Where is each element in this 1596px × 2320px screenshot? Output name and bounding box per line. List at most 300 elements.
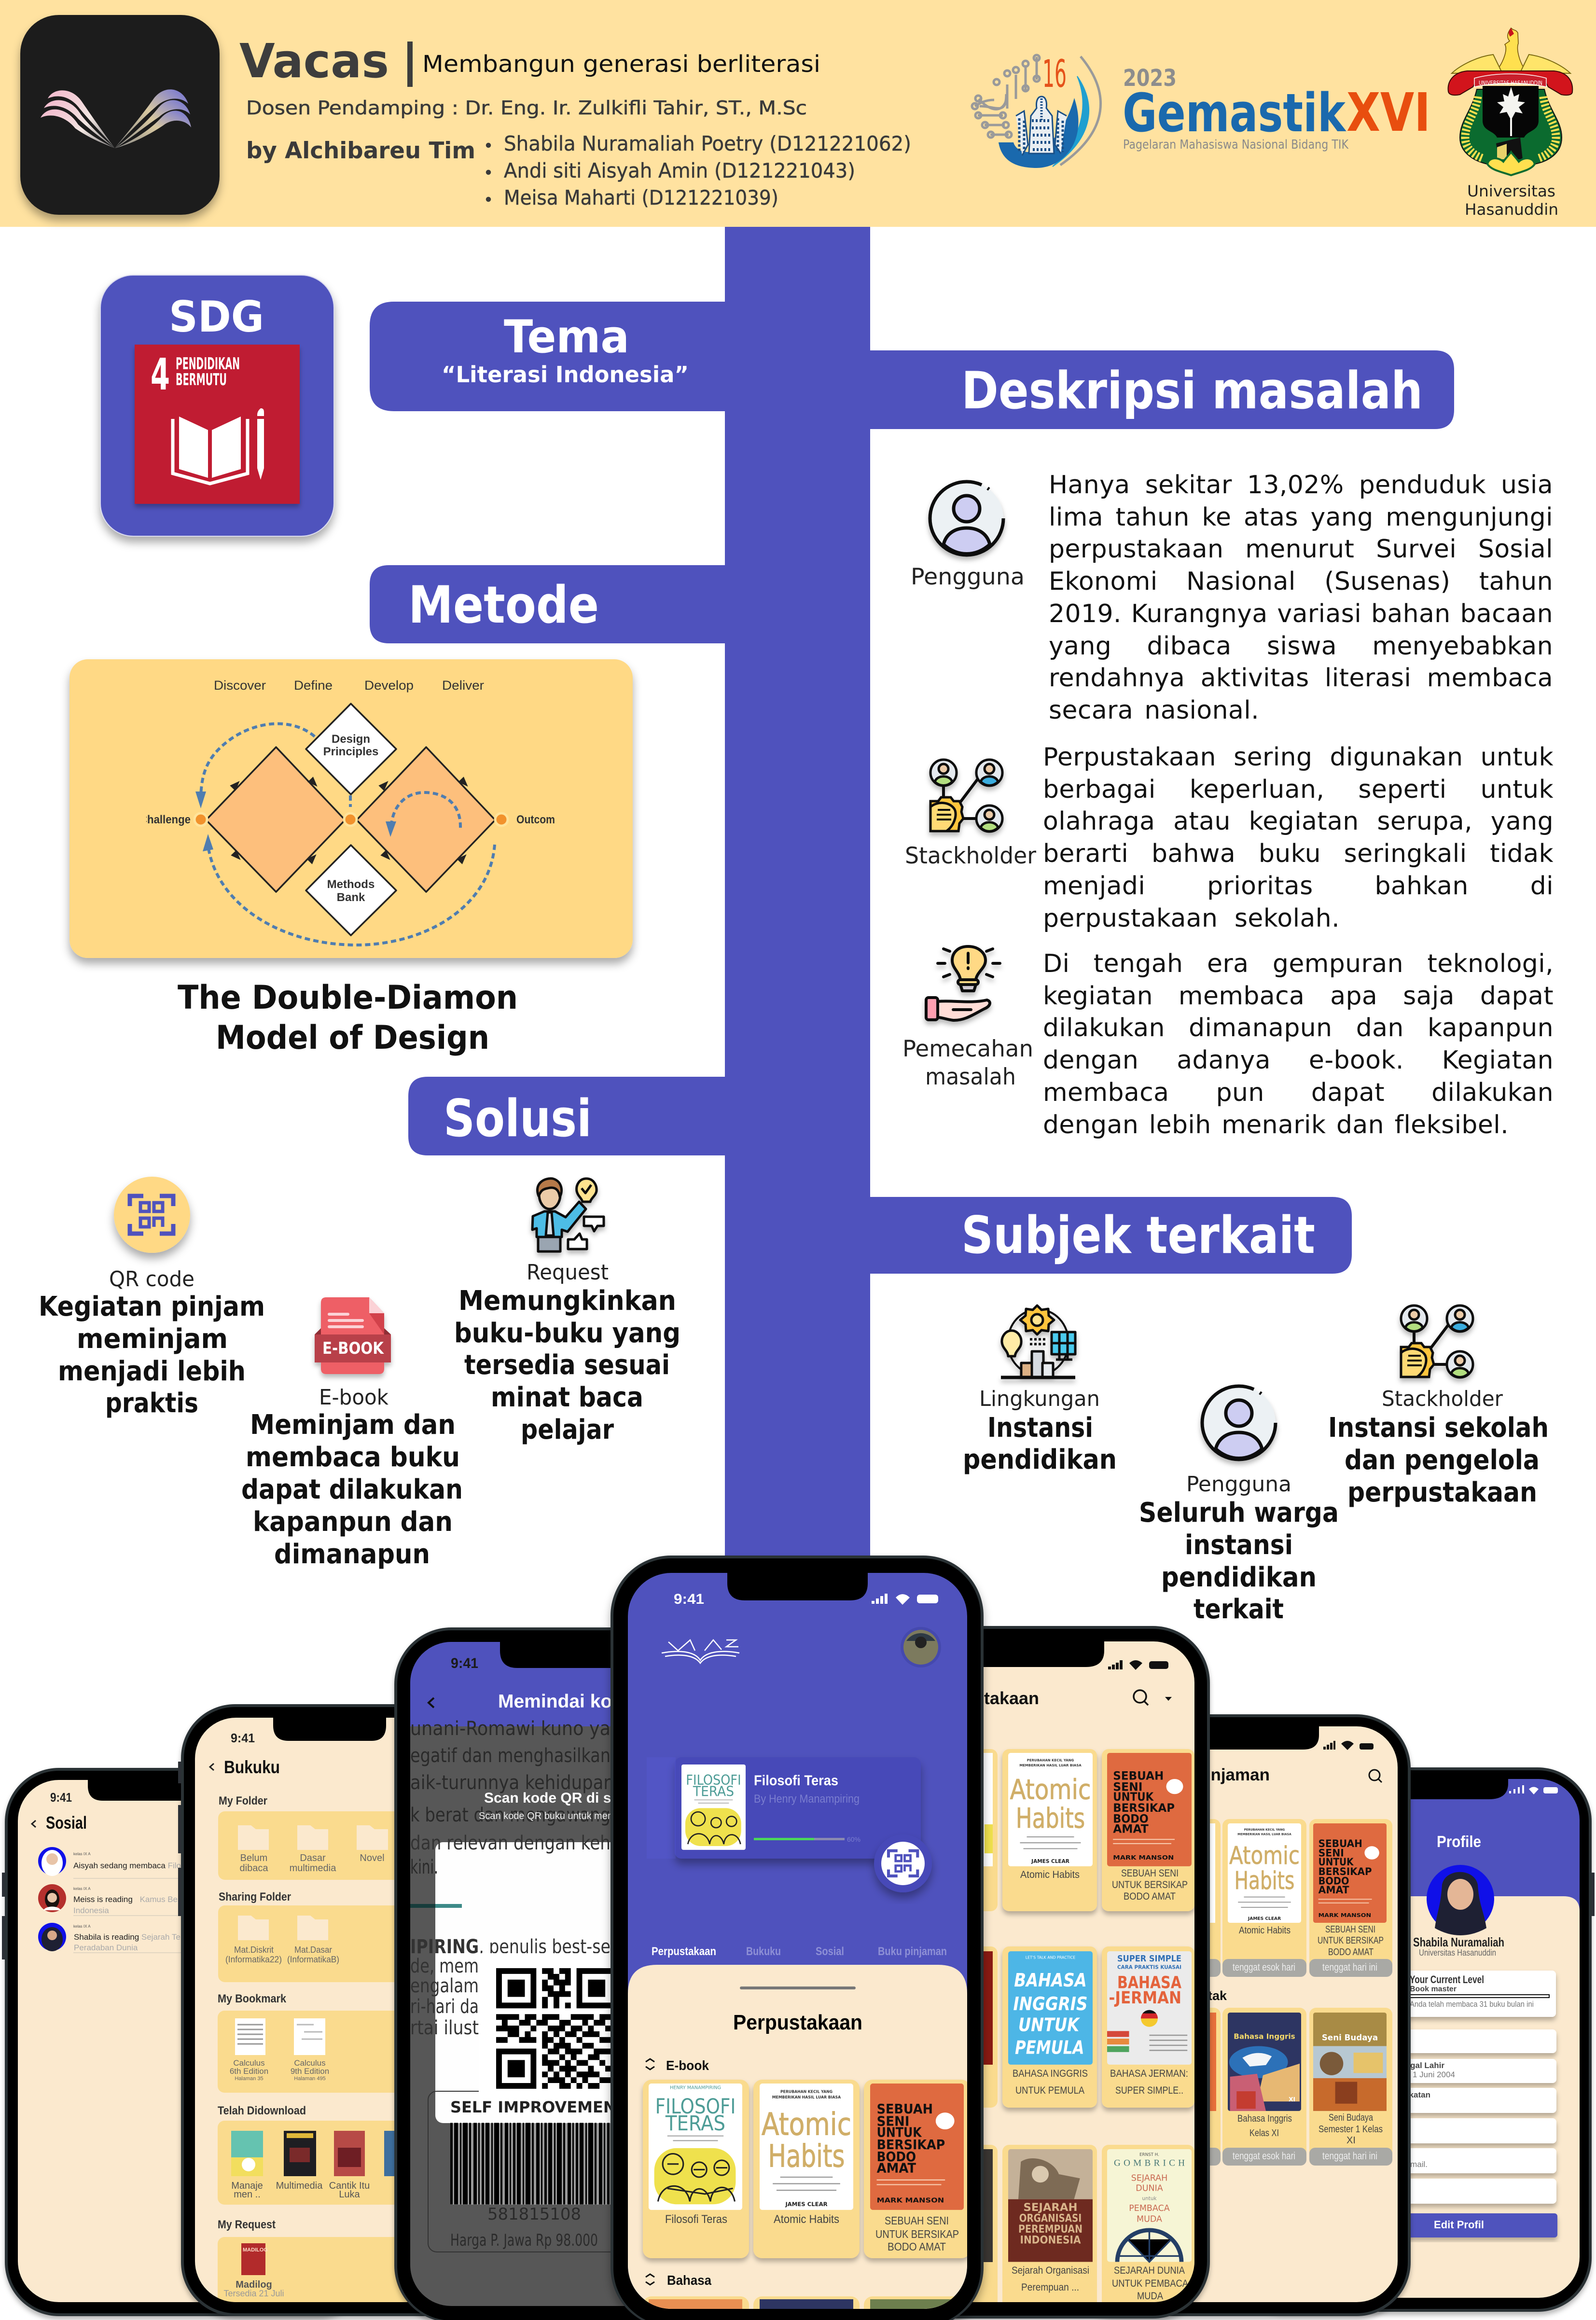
book card: Sebuah Seni: SEBUAH SENI <box>885 2214 949 2227</box>
paragraph: problem description for users: yang dibaca siswa menyebabkan <box>1049 632 1553 661</box>
book card: Sebuah Seni: SEBUAH <box>877 2102 933 2117</box>
edit profile button <box>1390 2213 1557 2237</box>
scanner window: engalam <box>410 1975 479 1997</box>
diagram text: Bank <box>337 891 365 904</box>
diagram caption: The Double-Diamon <box>178 979 518 1017</box>
section: My Folder: Belum <box>240 1853 267 1863</box>
diagram text: Principles <box>323 745 378 758</box>
loan cards row 1 <box>1178 1819 1392 1977</box>
icon: idea in hand <box>926 946 1000 1020</box>
paragraph: proposed solution: dengan lebih menarik dan fleksibel. <box>1043 1111 1509 1139</box>
current book card: Filosofi Teras <box>754 1773 838 1789</box>
paragraph: problem description for users: rendahnya aktivitas literasi membaca <box>1049 664 1553 693</box>
description: perpustakaan <box>1347 1477 1537 1508</box>
solution: E-book <box>241 1297 463 1570</box>
description: minat baca <box>491 1382 643 1413</box>
book grid row 3: Perempuan ... <box>1021 2282 1079 2293</box>
tabs: Perpustakaan <box>652 1945 716 1958</box>
cover: Bahasa Inggris untuk Pemula: UNTUK <box>1018 2014 1081 2036</box>
cover: Bahasa Inggris untuk Pemula: BAHASA <box>1014 1970 1087 1991</box>
cover: Bahasa Inggris untuk Pemula <box>1008 1951 1093 2065</box>
level card <box>1390 1971 1556 2017</box>
cover: Atomic Habits: MEMBERIKAN HASIL LUAR BIASA <box>1019 1764 1082 1767</box>
tabs: Sosial <box>816 1945 844 1958</box>
section: Sharing Folder <box>218 1890 459 1982</box>
central vertical column <box>725 227 870 1602</box>
cover: Sejarah Organisasi: PEREMPUAN <box>1018 2223 1083 2236</box>
section: Bahasa <box>646 2273 711 2288</box>
loan cards row 2: Seni Budaya <box>1329 2112 1374 2123</box>
book card: Filosofi Teras <box>643 2080 749 2258</box>
cover: Sejarah Dunia: GOMBRICH <box>1114 2158 1185 2168</box>
screen title: Sosial <box>46 1813 87 1833</box>
book card: Atomic Habits: Habits <box>768 2139 845 2175</box>
scanner header: 9:41 <box>451 1655 478 1671</box>
section: Telah Didownload: Telah Didownload <box>218 2104 306 2117</box>
Gemastik wordmark: 2023 <box>1123 65 1177 92</box>
panel: double diamond diagram <box>69 659 633 958</box>
description: kapanpun dan <box>253 1506 453 1538</box>
SDG 4 tile: 4 <box>151 349 170 400</box>
cover: Bahasa Inggris untuk Pemula: INGGRIS <box>1013 1993 1088 2015</box>
section: My Folder <box>218 1794 459 1880</box>
SDG 4 tile: BERMUTU <box>176 370 227 389</box>
description: dimanapun <box>274 1539 430 1570</box>
cover: Bahasa Jerman: BAHASA <box>1117 1973 1181 1993</box>
section: E-book <box>646 2058 709 2073</box>
paragraph: problem description for stakeholders: berbagai keperluan, seperti untuk <box>1043 775 1554 804</box>
cover: Sejarah Organisasi <box>1008 2149 1093 2262</box>
icon: QR code badge <box>114 1177 190 1253</box>
scanner window: IPIRING, penulis best-se <box>410 1936 611 1958</box>
phase labels: Develop <box>364 678 414 693</box>
QR code <box>479 1953 648 2101</box>
book grid row 2: SUPER SIMPLE.. <box>1115 2085 1183 2096</box>
section: Telah Didownload: Multimedia <box>276 2181 323 2191</box>
cover: Sejarah Dunia <box>1107 2149 1192 2262</box>
cover: Atomic Habits: PERUBAHAN KECIL YANG <box>1027 1758 1074 1762</box>
team members list: Andi siti Aisyah Amin (D121221043) <box>504 159 855 182</box>
diagram text: Challenge <box>139 813 191 826</box>
loan cards row 2 <box>1178 2008 1392 2166</box>
book card: Sebuah Seni <box>864 2080 970 2258</box>
icon: Vacas app logo <box>20 15 220 215</box>
status icons <box>1108 1660 1168 1670</box>
book grid row 1: SEBUAH SENI <box>1121 1868 1179 1879</box>
team members list <box>486 132 911 209</box>
cover: Sebuah Seni: AMAT <box>1318 1884 1349 1896</box>
subject: Stackholder <box>1328 1306 1549 1508</box>
phone: Peminjaman screen <box>1062 1714 1411 2316</box>
profile name: Universitas Hasanuddin <box>1419 1948 1496 1958</box>
section: Telah Didownload <box>218 2104 459 2205</box>
section: My Bookmark: Halaman 35 <box>235 2076 264 2082</box>
level card: Your Current Level <box>1410 1973 1484 1986</box>
title: Vacas: Vacas <box>239 34 389 88</box>
cover: Sejarah Dunia: ERNST H. <box>1139 2153 1159 2157</box>
cover: Sejarah Organisasi: ORGANISASI <box>1019 2212 1082 2224</box>
scanner window: kini. <box>410 1856 438 1878</box>
book grid row 2: BAHASA JERMAN: <box>1110 2068 1188 2079</box>
icon: user <box>1202 1386 1276 1459</box>
phase labels: Define <box>294 678 333 693</box>
subject: Pengguna <box>1139 1386 1339 1625</box>
next row book tops <box>643 2296 970 2320</box>
book grid row 3: UNTUK PEMBACA <box>1112 2278 1188 2289</box>
status time: 9:41 <box>50 1790 72 1805</box>
cover: Atomic Habits: JAMES CLEAR <box>1031 1859 1069 1864</box>
description: pendidikan <box>963 1444 1117 1475</box>
QR scan button <box>874 1834 932 1892</box>
profile header: Profile <box>1437 1833 1481 1850</box>
cover: Bahasa Inggris XI: Bahasa Inggris <box>1234 2032 1295 2041</box>
loan cards row 2: Kelas XI <box>1249 2128 1279 2139</box>
sheet title: Perpustakaan <box>733 2011 862 2034</box>
profile name: Shabila Nuramaliah <box>1413 1935 1504 1949</box>
paragraph: problem description for stakeholders: olahraga atau kegiatan serupa, yang <box>1043 807 1554 836</box>
paragraph: proposed solution: dilakukan dimanapun dan kapanpun <box>1043 1014 1554 1042</box>
avatar <box>901 1627 941 1667</box>
cover: Atomic Habits: Habits <box>1235 1866 1294 1895</box>
paragraph: problem description for users: perpustakaan menurut Survei Sosial <box>1049 535 1553 564</box>
label: Pemecahan masalah: masalah <box>925 1064 1016 1090</box>
scan instructions: Scan kode QR di sini <box>484 1790 628 1806</box>
social activity list: Aisyah sedang membaca Filosofi Teras <box>73 1861 216 1870</box>
description: membaca buku <box>246 1442 460 1473</box>
heading: Tema: “Literasi Indonesia” <box>442 361 689 388</box>
screen title <box>1170 1765 1382 1784</box>
label: Stackholder: Stackholder <box>905 843 1037 869</box>
section: My Folder: My Folder <box>219 1794 267 1807</box>
library sheet <box>628 1965 970 2320</box>
Gemastik wordmark <box>1123 65 1430 152</box>
profile fields <box>1390 2029 1556 2204</box>
book card: Sebuah Seni: UNTUK BERSIKAP <box>875 2228 959 2240</box>
SDG 4 tile: PENDIDIKAN <box>176 354 240 374</box>
team name: by Alchibareu Tim <box>246 138 475 164</box>
description: Memungkinkan <box>458 1285 676 1317</box>
status icons <box>1323 1741 1374 1750</box>
cover: Seni Budaya: Seni Budaya <box>1322 2033 1378 2042</box>
subject: Lingkungan <box>963 1306 1117 1475</box>
book grid row 3: SEJARAH DUNIA <box>1114 2265 1185 2276</box>
scanner header <box>410 1642 667 1726</box>
book grid row 1: BODO AMAT <box>1124 1891 1176 1902</box>
description: Instansi <box>987 1412 1093 1444</box>
edit profile button: Edit Profil <box>1434 2219 1484 2231</box>
heading: Subjek terkait: Subjek terkait <box>961 1206 1315 1265</box>
paragraph: problem description for stakeholders: menjadi prioritas bahkan di <box>1043 872 1554 901</box>
description <box>241 1409 463 1570</box>
description: menjadi lebih <box>58 1356 246 1387</box>
section: Sharing Folder: (Informatika22) <box>225 1955 282 1964</box>
section: Bahasa: Bahasa <box>667 2273 711 2288</box>
label: Pengguna <box>1186 1472 1291 1497</box>
description: terkait <box>1194 1594 1284 1625</box>
book card: Atomic Habits <box>753 2080 860 2258</box>
section: Telah Didownload: Luka <box>339 2189 361 2200</box>
description: meminjam <box>77 1323 228 1355</box>
section: My Request <box>218 2218 459 2314</box>
cover: Atomic Habits: Atomic <box>1010 1774 1091 1806</box>
heading: Tema: Tema <box>504 311 629 363</box>
book grid row 3: Sejarah Organisasi <box>1012 2265 1089 2276</box>
label: Stackholder <box>1382 1387 1503 1411</box>
description: Kegiatan pinjam <box>39 1291 265 1322</box>
cover: Sebuah Seni: AMAT <box>1113 1821 1149 1835</box>
cover: Atomic Habits: MEMBERIKAN HASIL LUAR BIASA <box>1237 1833 1291 1836</box>
book grid row 1: UNTUK BERSIKAP <box>1112 1879 1188 1890</box>
dashed arrow heads <box>195 792 396 851</box>
university name: Universitas <box>1467 182 1555 200</box>
description: praktis <box>105 1388 198 1419</box>
loan cards row 1: tenggat hari ini <box>1322 1962 1377 1973</box>
level card: Anda telah membaca 31 buku bulan ini <box>1410 2000 1534 2009</box>
section: My Bookmark: Calculus <box>294 2058 326 2068</box>
description: dapat dilakukan <box>241 1474 463 1505</box>
diagram text: Outcom <box>516 813 555 826</box>
social activity list: Indonesia <box>73 1906 109 1915</box>
field labels: Angkatan <box>1393 2090 1430 2099</box>
field labels <box>1391 2061 1455 2169</box>
description: pelajar <box>521 1414 614 1445</box>
heading: Metode: Metode <box>408 575 599 635</box>
heading: Subjek terkait <box>870 1197 1352 1274</box>
cover: Sebuah Seni: UNTUK <box>1318 1856 1354 1868</box>
social activity list: Peradaban Dunia <box>74 1943 138 1952</box>
paragraph: proposed solution: Di tengah era gempuran teknologi, <box>1043 949 1554 978</box>
Gemastik wordmark: Gemastik <box>1123 82 1346 144</box>
cover: Sebuah Seni: BODO <box>1318 1875 1349 1888</box>
scanner window: de, mem <box>410 1955 479 1977</box>
phone: Sosial screen <box>2 1768 372 2316</box>
book grid row 3: MUDA <box>1137 2291 1163 2302</box>
paragraph: problem description for users <box>1049 471 1553 725</box>
icon: Gemastik emblem: 16 <box>1042 53 1067 96</box>
loan cards row 1: tenggat esok hari <box>1233 1962 1295 1973</box>
book card: Filosofi Teras: TERAS <box>665 2112 725 2136</box>
cover: Bahasa Jerman: SUPER SIMPLE <box>1117 1954 1181 1964</box>
book page behind the overlay: aik-turunnya kehidupar <box>410 1772 611 1794</box>
section: Telah Didownload: men .. <box>234 2189 261 2200</box>
book card: Filosofi Teras: FILOSOFI <box>655 2095 736 2119</box>
paragraph: problem description for users: Ekonomi Nasional (Susenas) tahun <box>1049 567 1553 596</box>
icon: Stackholder network <box>930 760 1002 832</box>
profile header <box>1255 1779 1580 1924</box>
label: Pengguna: Pengguna <box>911 564 1025 590</box>
cover: Seni Budaya <box>1313 2013 1387 2111</box>
description <box>39 1291 265 1419</box>
paragraph: problem description for stakeholders: berarti bahwa buku seringkali tidak <box>1043 839 1554 868</box>
profile avatar <box>1427 1865 1494 1935</box>
book page behind the overlay: unani-Romawi kuno ya <box>410 1718 611 1740</box>
solution: QR code <box>39 1177 265 1419</box>
cover: Sebuah Seni: BERSIKAP <box>1113 1801 1175 1815</box>
description: tersedia sesuai <box>464 1349 670 1381</box>
level card: Book master <box>1410 1985 1457 1993</box>
description: Instansi sekolah <box>1328 1412 1549 1444</box>
cover: Sejarah Dunia: MUDA <box>1137 2215 1162 2224</box>
label: E-book <box>319 1385 389 1410</box>
icon: e-book <box>315 1297 391 1374</box>
profile name <box>1413 1935 1504 1958</box>
book card: Filosofi Teras: Filosofi Teras <box>665 2213 727 2226</box>
cover: Sejarah Dunia: PEMBACA <box>1129 2204 1170 2213</box>
cover: Atomic Habits <box>1008 1753 1093 1866</box>
label: Pemecahan masalah: Pemecahan <box>902 1036 1033 1062</box>
barcode sticker: Harga P. Jawa Rp 98.000 <box>450 2231 598 2250</box>
cover: Bahasa Jerman <box>1107 1951 1192 2065</box>
loan cards row 2: tenggat hari ini <box>1322 2151 1377 2162</box>
loan cards row 2: Bahasa Inggris <box>1237 2113 1292 2124</box>
section: My Bookmark: My Bookmark <box>218 1992 287 2005</box>
phone: Perpustakaan grid screen <box>820 1626 1210 2320</box>
cover: Sebuah Seni <box>1313 1823 1387 1923</box>
description: Seluruh warga <box>1139 1497 1339 1528</box>
section: My Request: Madilog <box>236 2279 272 2290</box>
paragraph: problem description for users: Hanya sekitar 13,02% penduduk usia <box>1049 471 1553 500</box>
status time: 9:41 <box>231 1731 255 1745</box>
node dots <box>194 813 508 826</box>
book card: Atomic Habits: MEMBERIKAN HASIL LUAR BIASA <box>772 2095 841 2099</box>
section: My Bookmark: Halaman 495 <box>294 2076 326 2082</box>
barcode sticker: SELF IMPROVEMENT <box>450 2098 627 2116</box>
social activity list: Shabila is reading Sejarah Terlengkap <box>74 1932 212 1942</box>
social activity list: kelas IX A <box>73 1887 91 1891</box>
section: Sharing Folder: Sharing Folder <box>219 1890 291 1903</box>
label: Request <box>527 1260 609 1285</box>
current book card <box>647 1757 921 1859</box>
loan cards row 1: SEBUAH SENI <box>1325 1924 1375 1935</box>
paragraph: problem description for stakeholders: Perpustakaan sering digunakan untuk <box>1043 743 1554 772</box>
Gemastik wordmark: XVI <box>1346 82 1430 143</box>
icon: Gemastik emblem <box>972 53 1101 168</box>
book page behind the overlay <box>410 1718 611 1826</box>
cover: Sejarah Dunia: untuk <box>1142 2196 1157 2202</box>
scanner window <box>410 1832 648 2123</box>
book page behind the overlay: egatif dan menghasilkan <box>410 1745 611 1767</box>
supervisor line: Dosen Pendamping : Dr. Eng. Ir. Zulkifli Tahir, ST., M.Sc <box>246 97 807 119</box>
team members list: Shabila Nuramaliah Poetry (D121221062) <box>504 132 911 155</box>
icon: person with idea <box>532 1179 604 1251</box>
cover: Filosofi Teras small: FILOSOFI <box>686 1772 741 1788</box>
paragraph: problem description for users: lima tahun ke atas yang mengunjungi <box>1049 503 1553 532</box>
book card: Sebuah Seni: BODO AMAT <box>888 2240 946 2253</box>
panel: SDG <box>100 275 334 536</box>
diamonds <box>206 704 495 935</box>
cover: Atomic Habits: Habits <box>1016 1802 1085 1834</box>
profile sheet <box>1255 1896 1580 2298</box>
book grid row 2: UNTUK PEMULA <box>1015 2085 1084 2096</box>
icon: Pengguna user <box>930 482 1003 555</box>
cover: Sejarah Dunia: DUNIA <box>1136 2184 1163 2193</box>
phone: Profile screen <box>1231 1767 1595 2312</box>
phase labels <box>214 678 484 693</box>
heading: Tema <box>370 302 725 411</box>
university name <box>1465 182 1558 219</box>
book card: Atomic Habits: PERUBAHAN KECIL YANG <box>780 2089 833 2094</box>
book grid row 2 <box>941 1946 1194 2108</box>
scan instructions: Scan kode QR buku untuk meminjam <box>479 1811 638 1821</box>
cover: Sebuah Seni: SEBUAH <box>1113 1769 1164 1783</box>
book card: Filosofi Teras: HENRY MANAMPIRING <box>670 2085 721 2091</box>
loan cards row 2: Semester 1 Kelas <box>1318 2124 1383 2135</box>
book card: Atomic Habits: Atomic <box>762 2107 851 2143</box>
section: Sharing Folder: (InformatikaB) <box>287 1955 339 1964</box>
section: My Bookmark: Calculus <box>233 2058 265 2068</box>
cover: Sebuah Seni: BODO <box>1113 1811 1149 1825</box>
book page behind the overlay: k berat dan mengawang <box>410 1804 611 1826</box>
book card: Sebuah Seni: UNTUK <box>877 2126 922 2140</box>
tagline: Membangun generasi berliterasi <box>422 51 820 78</box>
scanner window: rtai ilust <box>410 2017 479 2039</box>
phone: Bukuku screen <box>178 1704 567 2316</box>
section: My Folder: multimedia <box>290 1863 336 1874</box>
Gemastik wordmark: Pagelaran Mahasiswa Nasional Bidang TIK <box>1123 138 1349 152</box>
paragraph: proposed solution: membaca pun dapat dilakukan <box>1043 1078 1554 1107</box>
header band <box>0 0 1596 227</box>
cover: Atomic Habits: PERUBAHAN KECIL YANG <box>1244 1828 1285 1832</box>
paragraph: proposed solution: kegiatan membaca apa saja dapat <box>1043 982 1554 1011</box>
phone: QR scanner screen <box>394 1627 732 2320</box>
section: My Bookmark <box>218 1992 459 2093</box>
diagram text <box>139 733 555 904</box>
cover: Atomic Habits: JAMES CLEAR <box>1248 1917 1281 1921</box>
paragraph: problem description for users: secara nasional. <box>1049 696 1259 725</box>
cover: Bahasa Inggris XI: XI <box>1289 2096 1295 2103</box>
book card: Sebuah Seni: BERSIKAP <box>877 2138 945 2153</box>
section: My Request: My Request <box>218 2218 276 2231</box>
diagram text: Design <box>332 733 370 746</box>
paragraph: problem description for stakeholders <box>1043 743 1554 933</box>
screen title <box>925 1688 1172 1708</box>
book card: Atomic Habits: Atomic Habits <box>774 2213 839 2226</box>
phone: home screen center <box>611 1556 984 2320</box>
tabs <box>652 1945 947 1958</box>
book grid row 1: Atomic Habits <box>1020 1869 1080 1880</box>
social activity list <box>38 1847 216 1953</box>
cover: Bahasa Jerman: CARA PRAKTIS KUASAI <box>1117 1965 1181 1971</box>
book grid row 1 <box>941 1749 1194 1911</box>
section: Sharing Folder: Mat.Dasar <box>294 1945 332 1955</box>
cover: Sejarah Organisasi: INDONESIA <box>1020 2234 1081 2246</box>
cover: Sejarah Organisasi: SEJARAH <box>1023 2201 1078 2214</box>
field labels: 1 Juni 2004 <box>1413 2070 1455 2079</box>
section: Telah Didownload: Cantik Itu <box>329 2181 370 2191</box>
barcode sticker <box>428 2091 645 2252</box>
SDG 4 tile <box>135 345 300 504</box>
field labels: Email. <box>1405 2160 1428 2169</box>
section: My Folder: dibaca <box>240 1863 268 1874</box>
icon: city energy <box>1001 1306 1075 1377</box>
icon: Universitas Hasanuddin crest <box>1448 28 1572 175</box>
description: pendidikan <box>1161 1562 1317 1593</box>
section: My Bookmark: 6th Edition <box>230 2067 268 2076</box>
cover: Bahasa Jerman: -JERMAN <box>1109 1988 1181 2008</box>
label: Lingkungan <box>979 1387 1100 1411</box>
screen title: Bukuku <box>224 1757 280 1777</box>
cover: Sebuah Seni: SENI <box>1113 1779 1143 1793</box>
scanner window: dan relevan dengan keh <box>410 1832 611 1854</box>
heading: Deskripsi masalah: Deskripsi masalah <box>961 361 1423 420</box>
diagram text: Methods <box>327 878 375 891</box>
icon: network <box>1401 1306 1473 1377</box>
cover: Sejarah Dunia: SEJARAH <box>1131 2174 1167 2183</box>
current book card: By Henry Manampiring <box>754 1792 860 1806</box>
cover: Bahasa Inggris untuk Pemula: LET'S TALK AND PRACTICE <box>1026 1956 1075 1960</box>
section: Sharing Folder: Mat.Diskrit <box>234 1945 274 1955</box>
section: My Request: MADILOG <box>243 2247 268 2253</box>
